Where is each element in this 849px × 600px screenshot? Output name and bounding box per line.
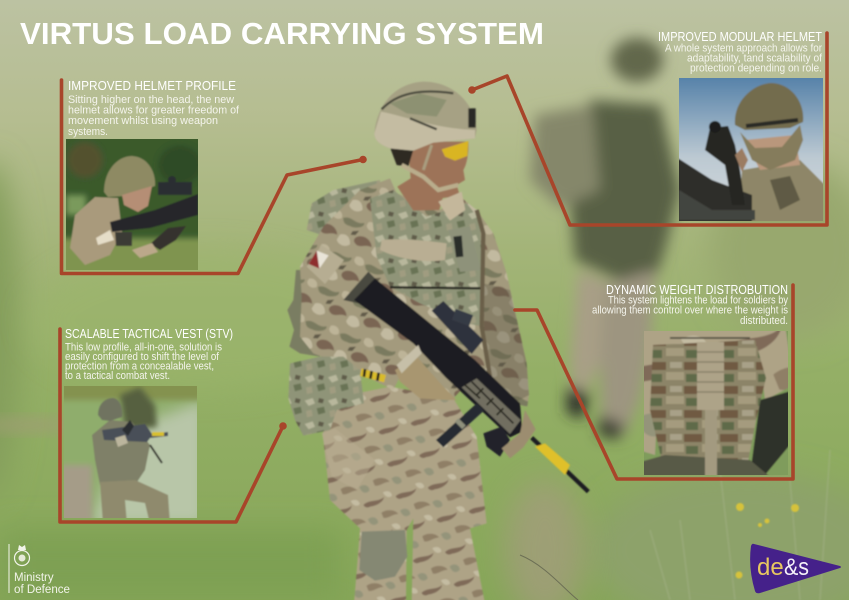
panel: improved modular helmet xyxy=(658,29,830,227)
description: A whole system approach allows for xyxy=(665,42,822,54)
helmet xyxy=(374,82,477,151)
backpack xyxy=(307,180,382,240)
wordmark: of Defence xyxy=(14,584,70,596)
description xyxy=(65,342,222,382)
arm patch xyxy=(307,245,344,284)
hair xyxy=(390,147,413,167)
collar xyxy=(438,192,465,221)
connector: scalable tactical vest xyxy=(60,329,285,522)
description xyxy=(665,42,823,74)
description: This system lightens the load for soldiers by xyxy=(608,294,788,306)
logo: de&s xyxy=(750,544,841,593)
neck and face xyxy=(397,142,468,211)
connector: improved modular helmet xyxy=(470,33,827,225)
photo: kneeling soldier xyxy=(64,386,197,518)
trousers xyxy=(322,387,487,600)
description xyxy=(68,94,240,138)
description: protection from a concealable vest, xyxy=(65,360,214,372)
muzzle xyxy=(532,438,588,492)
photo: soldier aiming in foliage xyxy=(66,139,198,270)
description: This low profile, all-in-one, solution is xyxy=(65,342,222,354)
description: helmet allows for greater freedom of xyxy=(68,104,240,116)
panel: improved helmet profile xyxy=(60,78,240,276)
gloves xyxy=(395,357,457,400)
description: allowing them control over where the weight is xyxy=(592,304,788,316)
title: VIRTUS LOAD CARRYING SYSTEM xyxy=(20,16,544,51)
yellow flowers xyxy=(736,503,799,578)
main soldier xyxy=(287,82,588,600)
panel: scalable tactical vest xyxy=(58,326,233,525)
description: movement whilst using weapon xyxy=(68,115,218,127)
vest xyxy=(370,190,484,327)
jacket xyxy=(300,178,529,407)
panel: dynamic weight distribution xyxy=(592,282,794,481)
background soldier (out of focus) xyxy=(530,38,680,440)
heading: IMPROVED MODULAR HELMET xyxy=(658,29,822,44)
connector: dynamic weight distribution xyxy=(515,285,793,479)
yellow tape xyxy=(360,368,386,382)
wordmark: Ministry xyxy=(14,572,54,584)
wordmark xyxy=(14,572,70,596)
description: Sitting higher on the head, the new xyxy=(68,94,234,106)
icon: royal crest xyxy=(14,545,30,566)
logo: de&s: &s xyxy=(784,554,809,581)
connector: improved helmet profile xyxy=(62,80,365,274)
side pack xyxy=(287,270,320,357)
logo: Ministry of Defence xyxy=(8,544,70,596)
description: distributed. xyxy=(740,315,788,327)
chest pouch xyxy=(380,239,447,261)
rifle xyxy=(343,272,588,492)
belt pouches xyxy=(288,357,364,436)
heading: IMPROVED HELMET PROFILE xyxy=(68,78,236,93)
description: protection depending on role. xyxy=(690,62,822,74)
description: systems. xyxy=(68,126,108,138)
knee pad xyxy=(359,530,407,581)
logo: de&s: de xyxy=(757,554,784,581)
description: adaptability, tand scalability of xyxy=(687,52,823,64)
description: easily configured to shift the level of xyxy=(65,351,220,363)
heading: DYNAMIC WEIGHT DISTROBUTION xyxy=(606,282,788,297)
description xyxy=(592,294,788,327)
photo: soldier in modular helmet with weapon xyxy=(679,78,823,221)
goggles xyxy=(442,141,468,161)
description: to a tactical combat vest. xyxy=(65,370,170,382)
heading: SCALABLE TACTICAL VEST (STV) xyxy=(65,326,233,341)
photo: vest rear view xyxy=(644,331,788,475)
chin strap xyxy=(402,165,458,190)
